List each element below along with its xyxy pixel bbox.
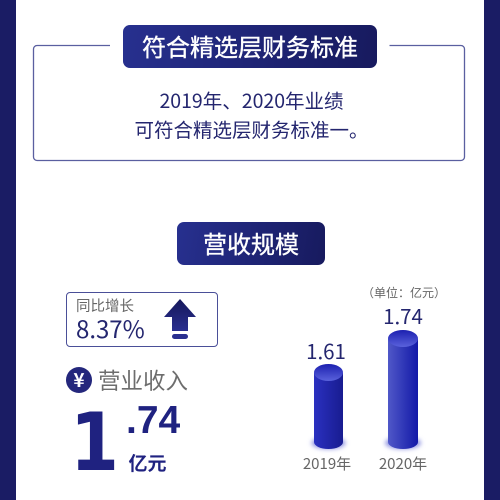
chart unit label: （单位：亿元） xyxy=(362,284,446,300)
label: operating revenue: 营业收入 xyxy=(98,364,188,396)
revenue integer digit: 1 xyxy=(70,396,119,489)
revenue decimal digits: .74 xyxy=(126,399,180,442)
bar chart: revenue by year xyxy=(309,330,424,452)
icon: yen coin: ¥ xyxy=(73,366,85,393)
bar: 2019 xyxy=(312,364,346,449)
growth value: 8.37% xyxy=(76,310,145,345)
panel: year-on-year growth xyxy=(66,292,218,347)
growth label: 同比增长 xyxy=(76,295,134,316)
text block: standard statement xyxy=(134,84,368,143)
heading: revenue scale: 营收规模 xyxy=(203,225,299,260)
icon: up arrow xyxy=(164,299,196,339)
axis label: 2019: 2019年 xyxy=(303,453,351,474)
revenue unit: 亿元 xyxy=(128,449,167,476)
value: 2019: 1.61 xyxy=(306,335,346,365)
icon: yen coin xyxy=(66,367,92,393)
heading: financial standard: 符合精选层财务标准 xyxy=(142,28,358,63)
text block: standard statement: 2019年、2020年业绩 xyxy=(159,84,344,114)
heading: revenue scale xyxy=(177,222,325,265)
heading: financial standard xyxy=(123,25,377,68)
bar: 2020 xyxy=(385,330,421,449)
text block: standard statement: 可符合精选层财务标准一。 xyxy=(134,114,368,143)
axis label: 2020: 2020年 xyxy=(379,453,427,474)
right side band xyxy=(484,0,500,500)
left side band xyxy=(0,0,16,500)
value: 2020: 1.74 xyxy=(383,300,423,330)
